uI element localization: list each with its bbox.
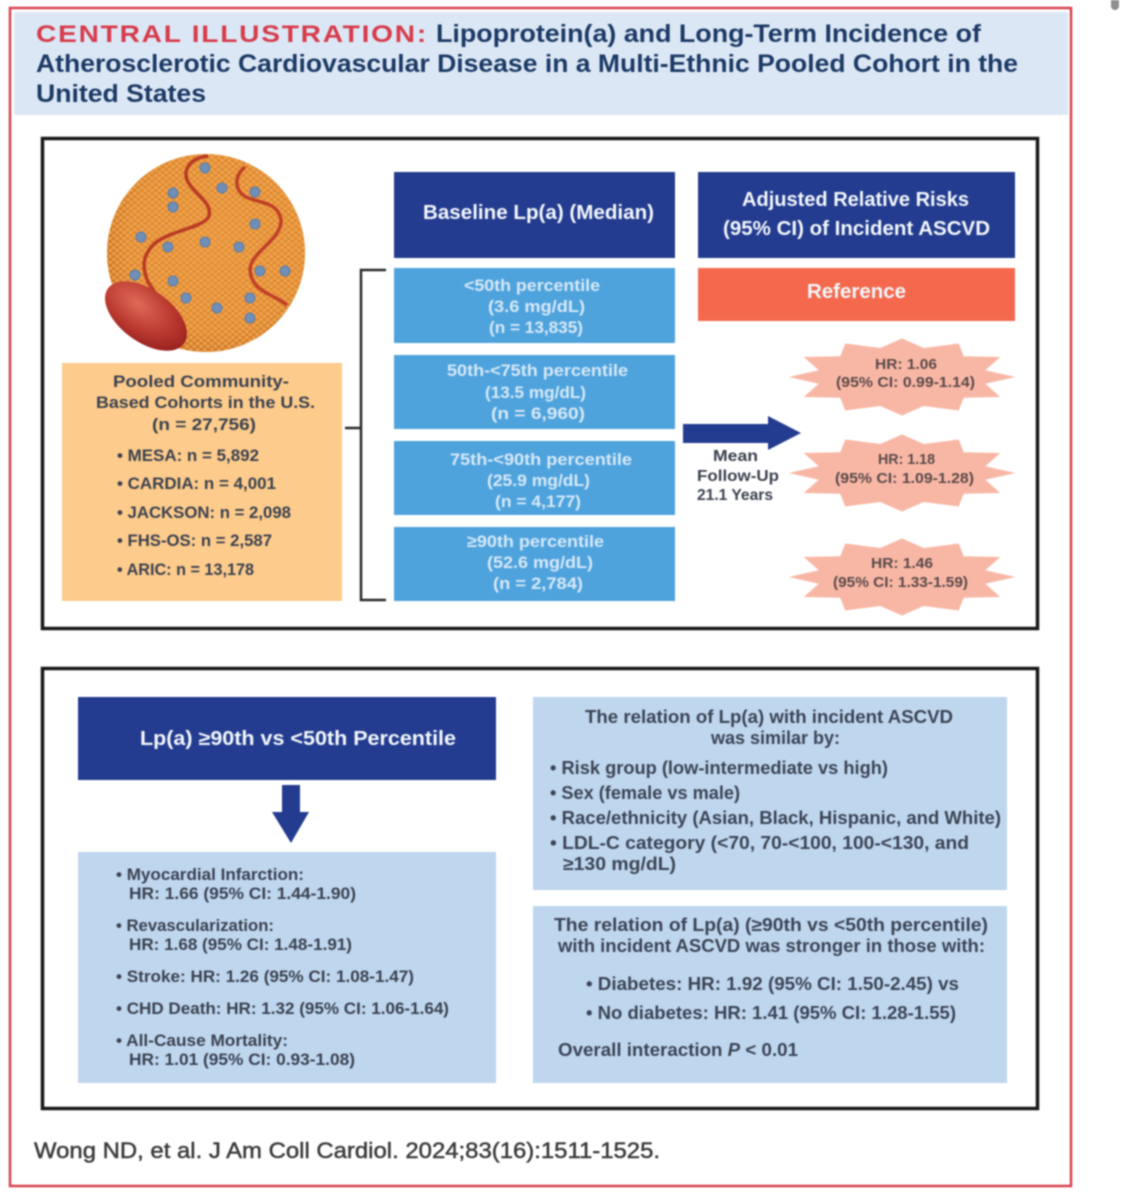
title banner	[14, 12, 1068, 115]
label: mean follow-up: Mean	[713, 448, 758, 465]
starburst: HR 1.06: HR: 1.06	[875, 357, 937, 373]
box: stronger relation with diabetes: Overall interaction P < 0.01	[558, 1040, 798, 1060]
percentile box 1: (n = 13,835)	[489, 318, 583, 337]
box: outcome hazard ratios: HR: 1.66 (95% CI: 1.44-1.90)	[129, 884, 356, 903]
box: pooled community-based cohorts: • CARDIA: n = 4,001	[117, 474, 276, 493]
box: pooled community-based cohorts: Based Cohorts in the U.S.	[96, 393, 315, 412]
title banner: CENTRAL ILLUSTRATION:	[36, 21, 428, 48]
box: pooled community-based cohorts	[62, 363, 342, 601]
panel: pooled cohort and relative risks	[42, 138, 1038, 628]
icon: lipoprotein(a) particle	[93, 154, 305, 365]
percentile box 4: ≥90th percentile	[467, 532, 604, 551]
label: mean follow-up	[697, 448, 779, 504]
box: pooled community-based cohorts: (n = 27,756)	[152, 415, 256, 434]
box: stronger relation with diabetes: • No diabetes: HR: 1.41 (95% CI: 1.28-1.55)	[586, 1003, 956, 1023]
panel: secondary outcomes and subgroups	[42, 668, 1038, 1108]
header: baseline Lp(a)	[394, 172, 675, 258]
title banner: Lipoprotein(a) and Long-Term Incidence of	[436, 20, 982, 48]
bracket connector	[345, 270, 386, 600]
percentile box 2	[394, 355, 675, 429]
header: 90th vs 50th percentile	[78, 697, 496, 780]
percentile box 4	[394, 527, 675, 601]
title banner: Atherosclerotic Cardiovascular Disease in a Multi-Ethnic Pooled Cohort in the	[36, 50, 1018, 78]
title banner: United States	[36, 80, 206, 108]
box: pooled community-based cohorts: • ARIC: n = 13,178	[117, 560, 254, 579]
box: outcome hazard ratios: • All-Cause Mortality:	[116, 1031, 288, 1050]
box: stronger relation with diabetes: • Diabetes: HR: 1.92 (95% CI: 1.50-2.45) vs	[586, 974, 959, 994]
box: outcome hazard ratios: • Myocardial Infarction:	[116, 865, 304, 884]
starburst: HR 1.18: HR: 1.18	[878, 452, 935, 468]
reference bar: Reference	[807, 281, 906, 303]
box: similar relation by subgroup: ≥130 mg/dL)	[563, 854, 676, 874]
percentile box 3: (25.9 mg/dL)	[487, 471, 590, 490]
box: outcome hazard ratios: • Stroke: HR: 1.26 (95% CI: 1.08-1.47)	[116, 967, 414, 986]
percentile box 3: (n = 4,177)	[495, 492, 581, 511]
starburst: HR 1.46	[789, 538, 1015, 616]
percentile box 1: <50th percentile	[464, 276, 600, 295]
starburst: HR 1.06	[789, 338, 1015, 416]
starburst: HR 1.18	[789, 434, 1015, 512]
starburst: HR 1.18: (95% CI: 1.09-1.28)	[835, 471, 974, 487]
box: similar relation by subgroup	[533, 697, 1007, 890]
box: pooled community-based cohorts: Pooled Community-	[113, 372, 289, 391]
box: pooled community-based cohorts: • MESA: n = 5,892	[117, 446, 259, 465]
box: outcome hazard ratios: HR: 1.68 (95% CI: 1.48-1.91)	[129, 935, 352, 954]
header: 90th vs 50th percentile: Lp(a) ≥90th vs <50th Percentile	[140, 728, 456, 750]
starburst: HR 1.46: HR: 1.46	[871, 556, 933, 572]
label: mean follow-up: 21.1 Years	[697, 487, 773, 504]
label: mean follow-up: Follow-Up	[697, 468, 779, 485]
starburst: HR 1.06: (95% CI: 0.99-1.14)	[836, 375, 975, 391]
percentile box 2: (n = 6,960)	[491, 404, 585, 423]
percentile box 1: (3.6 mg/dL)	[488, 297, 585, 316]
box: stronger relation with diabetes: with incident ASCVD was stronger in those with:	[557, 936, 985, 956]
percentile box 1	[394, 268, 675, 343]
header: adjusted relative risks: Adjusted Relative Risks	[742, 189, 969, 211]
percentile box 2: (13.5 mg/dL)	[485, 383, 586, 402]
box: outcome hazard ratios: • CHD Death: HR: 1.32 (95% CI: 1.06-1.64)	[116, 999, 449, 1018]
box: pooled community-based cohorts: • JACKSON: n = 2,098	[117, 503, 291, 522]
header: baseline Lp(a): Baseline Lp(a) (Median)	[423, 202, 654, 224]
percentile box 2: 50th-<75th percentile	[447, 361, 628, 380]
box: similar relation by subgroup: • LDL-C category (<70, 70-<100, 100-<130, and	[550, 833, 969, 853]
box: similar relation by subgroup: The relation of Lp(a) with incident ASCVD	[585, 707, 953, 727]
box: stronger relation with diabetes: The relation of Lp(a) (≥90th vs <50th percentile)	[554, 915, 988, 935]
arrow: down	[272, 785, 309, 843]
arrow: follow-up	[683, 416, 801, 450]
box: similar relation by subgroup: • Race/ethnicity (Asian, Black, Hispanic, and White)	[550, 808, 1001, 828]
box: similar relation by subgroup: • Sex (female vs male)	[550, 783, 740, 803]
box: outcome hazard ratios: HR: 1.01 (95% CI: 0.93-1.08)	[129, 1050, 355, 1069]
box: similar relation by subgroup: was similar by:	[710, 728, 840, 748]
percentile box 4: (52.6 mg/dL)	[487, 553, 593, 572]
header: adjusted relative risks: (95% CI) of Incident ASCVD	[723, 218, 990, 240]
citation: Wong ND, et al. J Am Coll Cardiol. 2024;83(16):1511-1525.	[34, 1138, 660, 1163]
starburst: HR 1.46: (95% CI: 1.33-1.59)	[833, 575, 968, 591]
box: pooled community-based cohorts: • FHS-OS: n = 2,587	[117, 531, 272, 550]
box: similar relation by subgroup: • Risk group (low-intermediate vs high)	[550, 758, 888, 778]
percentile box 4: (n = 2,784)	[493, 574, 583, 593]
scrollbar mark	[1111, 0, 1119, 10]
header: adjusted relative risks	[698, 172, 1015, 258]
percentile box 3: 75th-<90th percentile	[450, 450, 632, 469]
box: outcome hazard ratios	[78, 852, 496, 1083]
box: stronger relation with diabetes	[533, 906, 1007, 1083]
box: outcome hazard ratios: • Revascularization:	[116, 916, 274, 935]
percentile box 3	[394, 441, 675, 515]
reference bar	[698, 268, 1015, 321]
